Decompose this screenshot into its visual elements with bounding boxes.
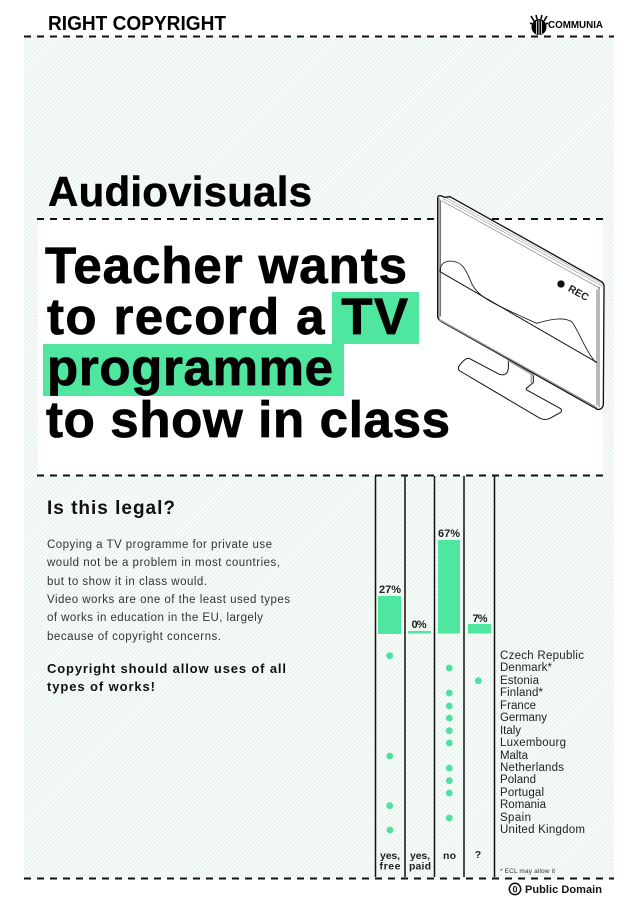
call to action [47, 661, 286, 694]
series title: RIGHT COPYRIGHT [48, 13, 226, 35]
bar: unknown 7% [468, 613, 491, 634]
logo: Communia [530, 15, 603, 35]
country list: Netherlands [500, 762, 564, 774]
headline line 3: programme [47, 339, 333, 396]
bar: yes, paid 0% [408, 619, 431, 634]
body text [46, 539, 290, 643]
body text: of works in education in the EU, largely [47, 612, 263, 624]
record indicator [557, 280, 565, 288]
column labels [380, 849, 481, 872]
body text: would not be a problem in most countries, [46, 557, 280, 569]
country list: Luxembourg [500, 737, 566, 749]
column labels: no [443, 850, 456, 862]
bar: no 67% [438, 528, 460, 634]
country list: Romania [500, 799, 547, 811]
headline line 2: to record a TV [47, 288, 408, 345]
screen wave [440, 261, 596, 362]
country list: Estonia [500, 675, 540, 687]
headline [43, 237, 450, 448]
call to action: types of works! [47, 679, 155, 694]
country list: Malta [500, 750, 529, 762]
footnote: * ECL may allow it [500, 868, 555, 875]
logo: Communia: COMMUNIA [548, 20, 603, 31]
body text: Video works are one of the least used types [47, 594, 290, 606]
country list: Portugal [500, 787, 544, 799]
body text: because of copyright concerns. [47, 631, 221, 643]
headline line 4: to show in class [46, 391, 450, 448]
bar: yes, free 27% [378, 584, 401, 634]
bar: no 67%: 67% [438, 528, 460, 540]
country list: Poland [500, 774, 536, 786]
bar chart with country dots [376, 476, 494, 877]
bar: unknown 7%: 7% [472, 613, 488, 625]
country list: Czech Republic [500, 650, 584, 662]
bar: yes, free 27%: 27% [379, 584, 401, 596]
call to action: Copyright should allow uses of all [47, 661, 286, 676]
illustration: TV monitor recording: REC [566, 284, 591, 304]
illustration: TV monitor recording [438, 196, 604, 419]
highlight: programme [43, 344, 344, 396]
monitor stand base [458, 358, 562, 419]
country dots [386, 652, 482, 833]
country list: France [500, 700, 536, 712]
body text: but to show it in class would. [47, 576, 207, 588]
headline line 1: Teacher wants [45, 237, 407, 294]
license: public domain: Public Domain [525, 884, 602, 896]
highlight: TV [332, 292, 419, 344]
bar: yes, paid 0%: 0% [412, 619, 427, 631]
column labels: yes, [410, 850, 430, 862]
country list: United Kingdom [500, 824, 585, 836]
column labels: paid [409, 860, 431, 872]
section heading: Audiovisuals: Audiovisuals [48, 168, 312, 215]
column labels: yes, [380, 850, 400, 862]
country list: Denmark* [500, 662, 553, 674]
body text: Copying a TV programme for private use [47, 539, 272, 551]
column labels: free [380, 860, 401, 872]
country list: Spain [500, 812, 531, 824]
column labels: ? [475, 849, 481, 861]
country list: Italy [500, 725, 521, 737]
question heading: Is this legal? [47, 498, 175, 519]
country list [500, 650, 585, 836]
country list: Germany [500, 712, 547, 724]
icon: CC0: 0 [512, 884, 518, 894]
monitor body [438, 196, 604, 409]
country list: Finland* [500, 687, 544, 699]
